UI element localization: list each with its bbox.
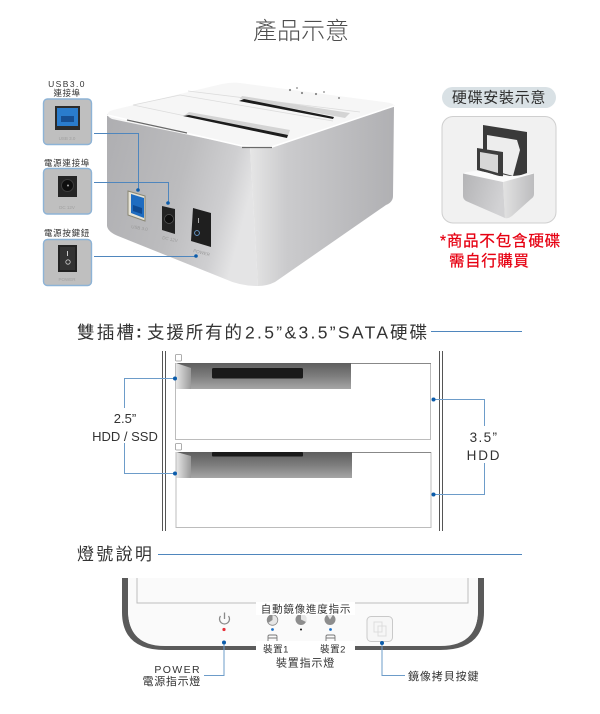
- callout: USB3.0 port: [44, 79, 92, 144]
- slot 2: [239, 96, 350, 119]
- label: mirror copy button: [380, 641, 479, 683]
- label: mirror copy button: 鏡像拷貝按鍵: [408, 669, 479, 683]
- port captions: USB 3.0: [131, 224, 149, 232]
- bracket: 2.5 inch label: 2.5”: [114, 411, 136, 426]
- port captions: DC 12V: [162, 235, 178, 243]
- label: device indicators: 裝置1: [263, 644, 289, 656]
- mirror button: [367, 616, 392, 642]
- note: disks not included: 需自行購買: [449, 252, 530, 270]
- power icon: [220, 612, 229, 624]
- heading: dual slots: 2.5”&3.5”SATA: [245, 322, 388, 342]
- heading: dual slots: 硬碟: [390, 322, 427, 342]
- callout: power jack: [44, 158, 92, 214]
- callout: power jack: 電源連接埠: [44, 158, 90, 168]
- dc jack: [162, 206, 175, 234]
- status leds: [271, 628, 332, 631]
- rocker switch: [191, 208, 211, 247]
- callout: power switch: 電源按鍵鈕: [44, 228, 90, 238]
- mini dock: [463, 171, 534, 218]
- connector lines: ports: [94, 134, 198, 258]
- bracket: 3.5 inch label: HDD: [467, 448, 501, 463]
- panel: install demo image: [442, 116, 556, 223]
- usb port: [128, 191, 145, 221]
- callout: power jack: DC 12V: [59, 205, 75, 210]
- product photo: docking station: [107, 83, 395, 286]
- heading: led legend: 燈號說明: [77, 545, 154, 564]
- bracket: 3.5 inch label: [432, 398, 501, 496]
- device icons: [176, 354, 182, 450]
- 2.5 inch disk: [477, 148, 503, 177]
- callout: power switch: POWER: [58, 277, 76, 282]
- diagram: dual slots top view: [162, 351, 442, 531]
- note: disks not included: *商品不包含硬碟: [440, 232, 561, 250]
- label: device indicators: [256, 641, 355, 670]
- power led: [222, 628, 226, 631]
- heading: install demo pill: [442, 87, 556, 108]
- callout: USB3.0 port: 連接埠: [53, 88, 81, 98]
- left face: [107, 114, 258, 286]
- top face: [108, 83, 395, 148]
- heading: dual slots: [77, 322, 522, 342]
- label: device indicators: 裝置2: [320, 644, 346, 656]
- progress icons: [267, 614, 336, 625]
- heading: dual slots: 支援所有的: [147, 322, 242, 342]
- slot 1: [176, 363, 431, 440]
- port captions: [131, 224, 211, 257]
- callout: USB3.0 port: USB 3.0: [59, 136, 76, 141]
- top edge highlight: [107, 106, 394, 147]
- heading: install demo pill: 硬碟安裝示意: [452, 88, 546, 106]
- callout: USB3.0 port: USB3.0: [48, 79, 86, 89]
- callout: power switch: [44, 228, 92, 286]
- right face: [250, 106, 394, 286]
- plate edges: [133, 91, 360, 137]
- label: power indicator: POWER: [154, 664, 201, 676]
- indicator leds: [289, 87, 340, 99]
- heading: dual slots: :: [136, 322, 142, 342]
- slot 2: [176, 452, 431, 528]
- slot 1: [183, 112, 290, 138]
- title: 產品示意: [253, 18, 349, 45]
- label: device indicators: 裝置指示燈: [276, 656, 335, 670]
- dark rim accents: [127, 120, 272, 148]
- bracket: 3.5 inch label: 3.5”: [470, 430, 498, 445]
- heading: dual slots: 雙插槽: [77, 322, 134, 342]
- label: auto mirror progress: 自動鏡像進度指示: [261, 602, 351, 616]
- label: power indicator: 電源指示燈: [142, 674, 201, 688]
- port captions: POWER: [193, 248, 211, 257]
- label: power indicator: [142, 640, 226, 688]
- bracket: 2.5 inch label: [92, 376, 177, 476]
- diagram: front panel: [122, 578, 484, 650]
- bracket: 2.5 inch label: HDD / SSD: [92, 429, 158, 444]
- panel: port callouts: [44, 79, 92, 286]
- note: disks not included: [440, 232, 561, 270]
- 3.5 inch disk: [483, 125, 527, 177]
- device icons: [268, 635, 335, 643]
